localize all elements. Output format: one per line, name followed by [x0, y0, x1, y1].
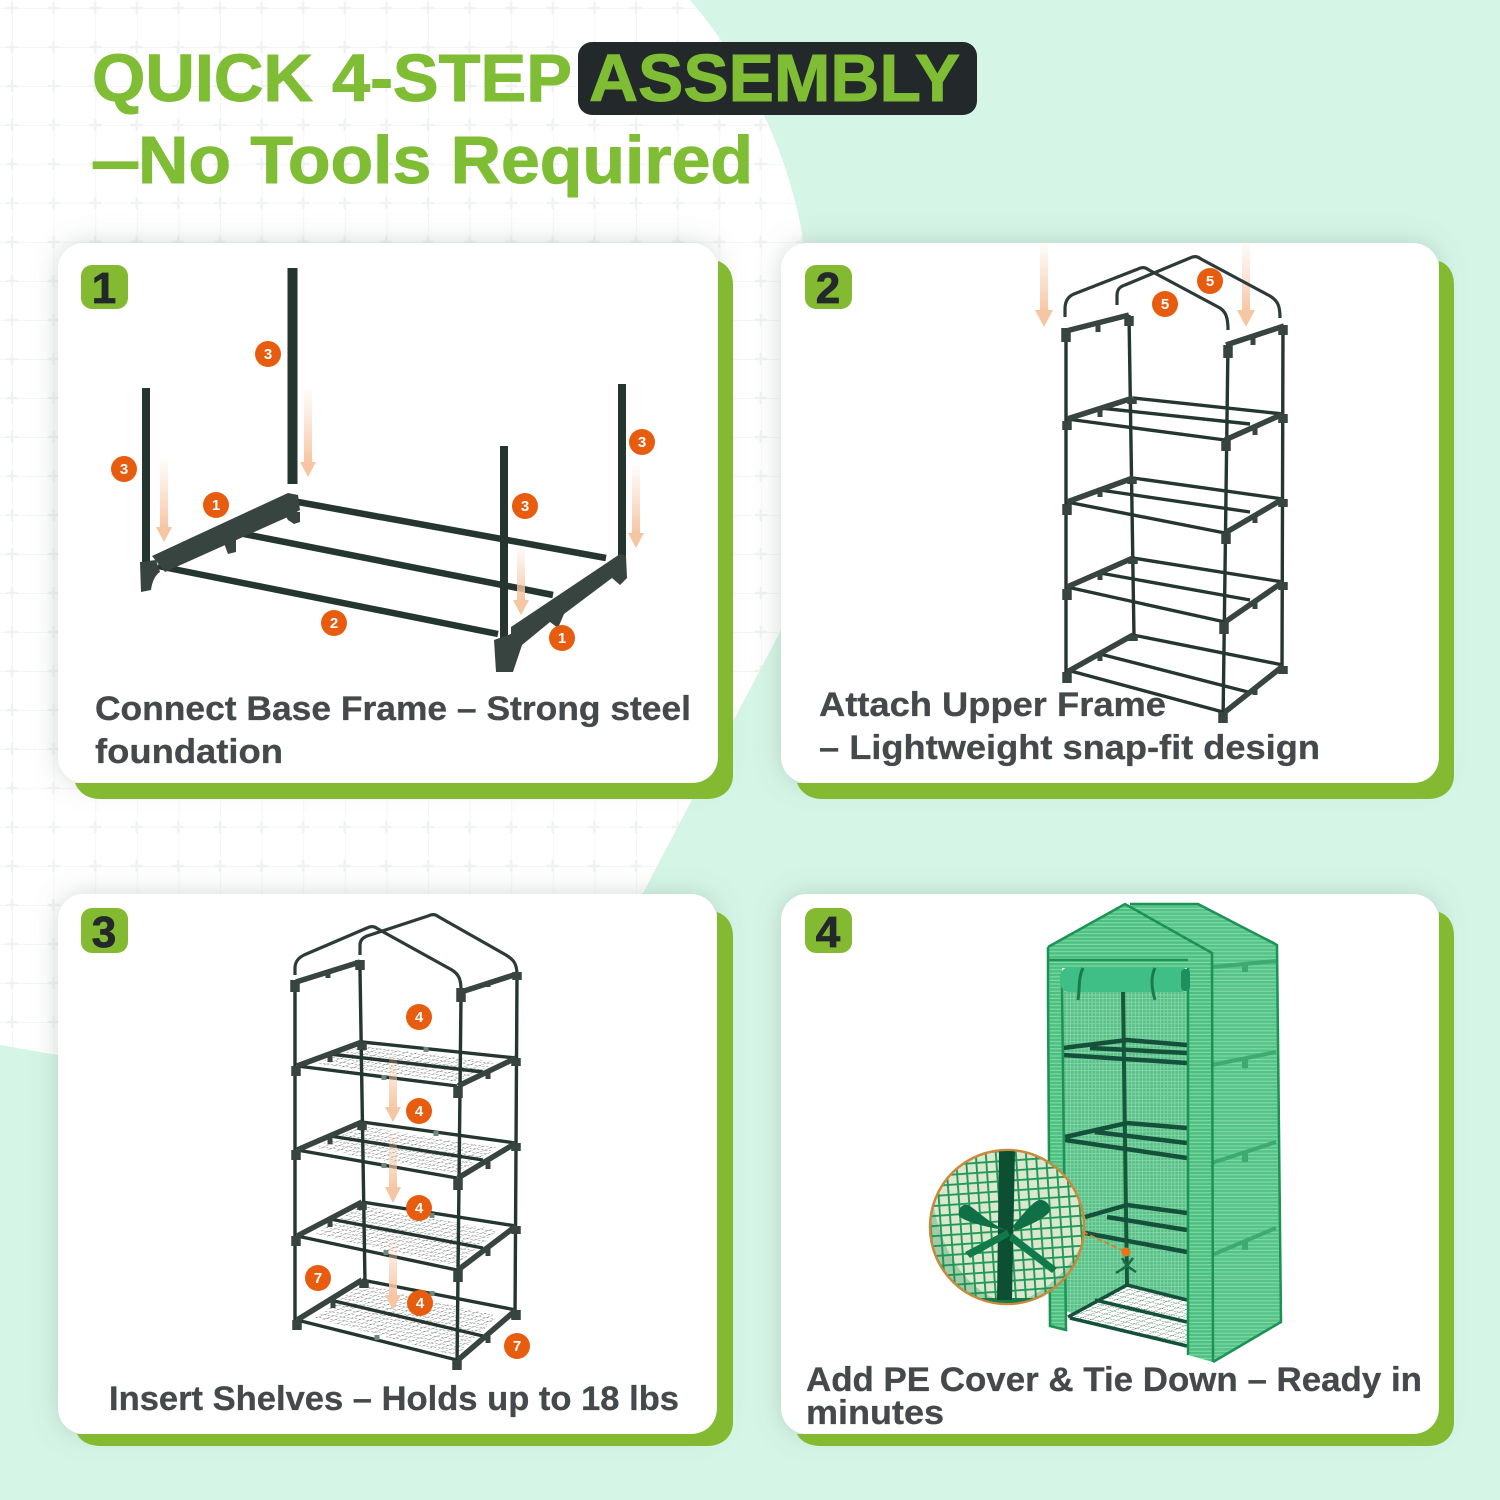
card green backing — [797, 261, 1454, 799]
left flap — [1048, 958, 1066, 1330]
caption: minutes — [806, 1394, 944, 1432]
part number badges: 7 — [513, 1338, 521, 1355]
caption: Attach Upper Frame — [819, 686, 1166, 724]
part number badges — [1152, 268, 1223, 317]
roll ties — [1078, 968, 1155, 1000]
white gap below cover — [1066, 1316, 1188, 1356]
upper frame illustration — [1065, 257, 1284, 723]
callout: magnified tie detail — [930, 1150, 1084, 1310]
title line 2: no tools required: — — [93, 123, 138, 198]
arrow — [628, 465, 644, 548]
part number badges: 3 — [264, 346, 272, 363]
caption: Add PE Cover & Tie Down – Ready in — [806, 1361, 1422, 1399]
title highlight pill: ASSEMBLY — [589, 41, 960, 116]
card green backing — [77, 912, 733, 1446]
part number badges — [111, 341, 655, 651]
callout connector — [1083, 1232, 1130, 1256]
step number 4 — [805, 908, 852, 957]
part number badges: 3 — [638, 434, 646, 451]
seam edges — [1048, 904, 1281, 1362]
covered greenhouse illustration — [1048, 904, 1281, 1362]
caption — [806, 1361, 1422, 1432]
step number 2 — [805, 264, 852, 313]
title — [92, 41, 977, 198]
step number 1: 1 — [92, 264, 116, 313]
caption: Connect Base Frame – Strong steel — [95, 690, 691, 728]
caption: foundation — [95, 733, 283, 771]
part number badges: 5 — [1206, 273, 1214, 290]
panel: step 4 add PE cover — [781, 894, 1454, 1446]
frame seams on side panel — [1212, 961, 1276, 1255]
part number badges: 5 — [1161, 296, 1169, 313]
step number 1 — [81, 264, 128, 313]
small bow — [1116, 1258, 1136, 1273]
title line 2: no tools required: No Tools Required — [138, 123, 753, 198]
caption — [819, 686, 1320, 767]
card white face with shadow — [781, 894, 1439, 1434]
part number badges: 2 — [330, 615, 338, 632]
part number badges: 1 — [212, 497, 220, 514]
part number badges — [305, 1004, 530, 1359]
card white face with shadow — [58, 243, 718, 783]
part number badges: 4 — [415, 1009, 424, 1026]
base frame illustration — [140, 268, 627, 672]
caption: – Lightweight snap-fit design — [819, 729, 1320, 767]
part number badges: 7 — [314, 1270, 322, 1287]
caption: Insert Shelves – Holds up to 18 lbs — [109, 1380, 679, 1418]
step number 3: 3 — [92, 908, 116, 957]
rolled up door — [1060, 967, 1190, 992]
part number badges: 1 — [558, 630, 566, 647]
step number 4: 4 — [816, 908, 841, 957]
arrow — [300, 390, 316, 477]
arrow — [385, 1050, 401, 1122]
gable front — [1048, 904, 1212, 968]
arrow — [513, 545, 529, 615]
roof and side panel — [1130, 904, 1281, 1362]
card white face with shadow — [58, 894, 717, 1434]
seam tabs — [1242, 964, 1248, 1250]
right flap — [1188, 968, 1213, 1362]
step number 3 — [81, 908, 128, 957]
card white face with shadow — [781, 243, 1439, 783]
door interior — [1062, 985, 1189, 1355]
background: white curved area with faint grid — [0, 0, 809, 1060]
caption — [95, 690, 691, 771]
part number badges: 3 — [120, 461, 128, 478]
part number badges: 4 — [416, 1295, 425, 1312]
card green backing — [75, 261, 733, 799]
arrow — [385, 1235, 401, 1310]
panel: step 1 connect base frame — [58, 243, 733, 799]
panel: step 2 attach upper frame — [781, 243, 1454, 799]
shelf tower illustration — [295, 915, 517, 1370]
step number 2: 2 — [816, 264, 840, 313]
arrow — [385, 1130, 401, 1203]
card green backing — [797, 912, 1454, 1446]
part number badges: 4 — [415, 1200, 424, 1217]
bottom opening — [1068, 1285, 1189, 1347]
arrow — [156, 460, 172, 542]
title line 1: Quick 4-step: QUICK 4-STEP — [92, 41, 572, 116]
part number badges: 4 — [415, 1103, 424, 1120]
center post and shelves — [1063, 992, 1187, 1346]
arrow — [1035, 243, 1053, 327]
arrow — [1237, 243, 1255, 327]
part number badges: 3 — [521, 498, 529, 515]
panel: step 3 insert shelves — [58, 894, 733, 1446]
